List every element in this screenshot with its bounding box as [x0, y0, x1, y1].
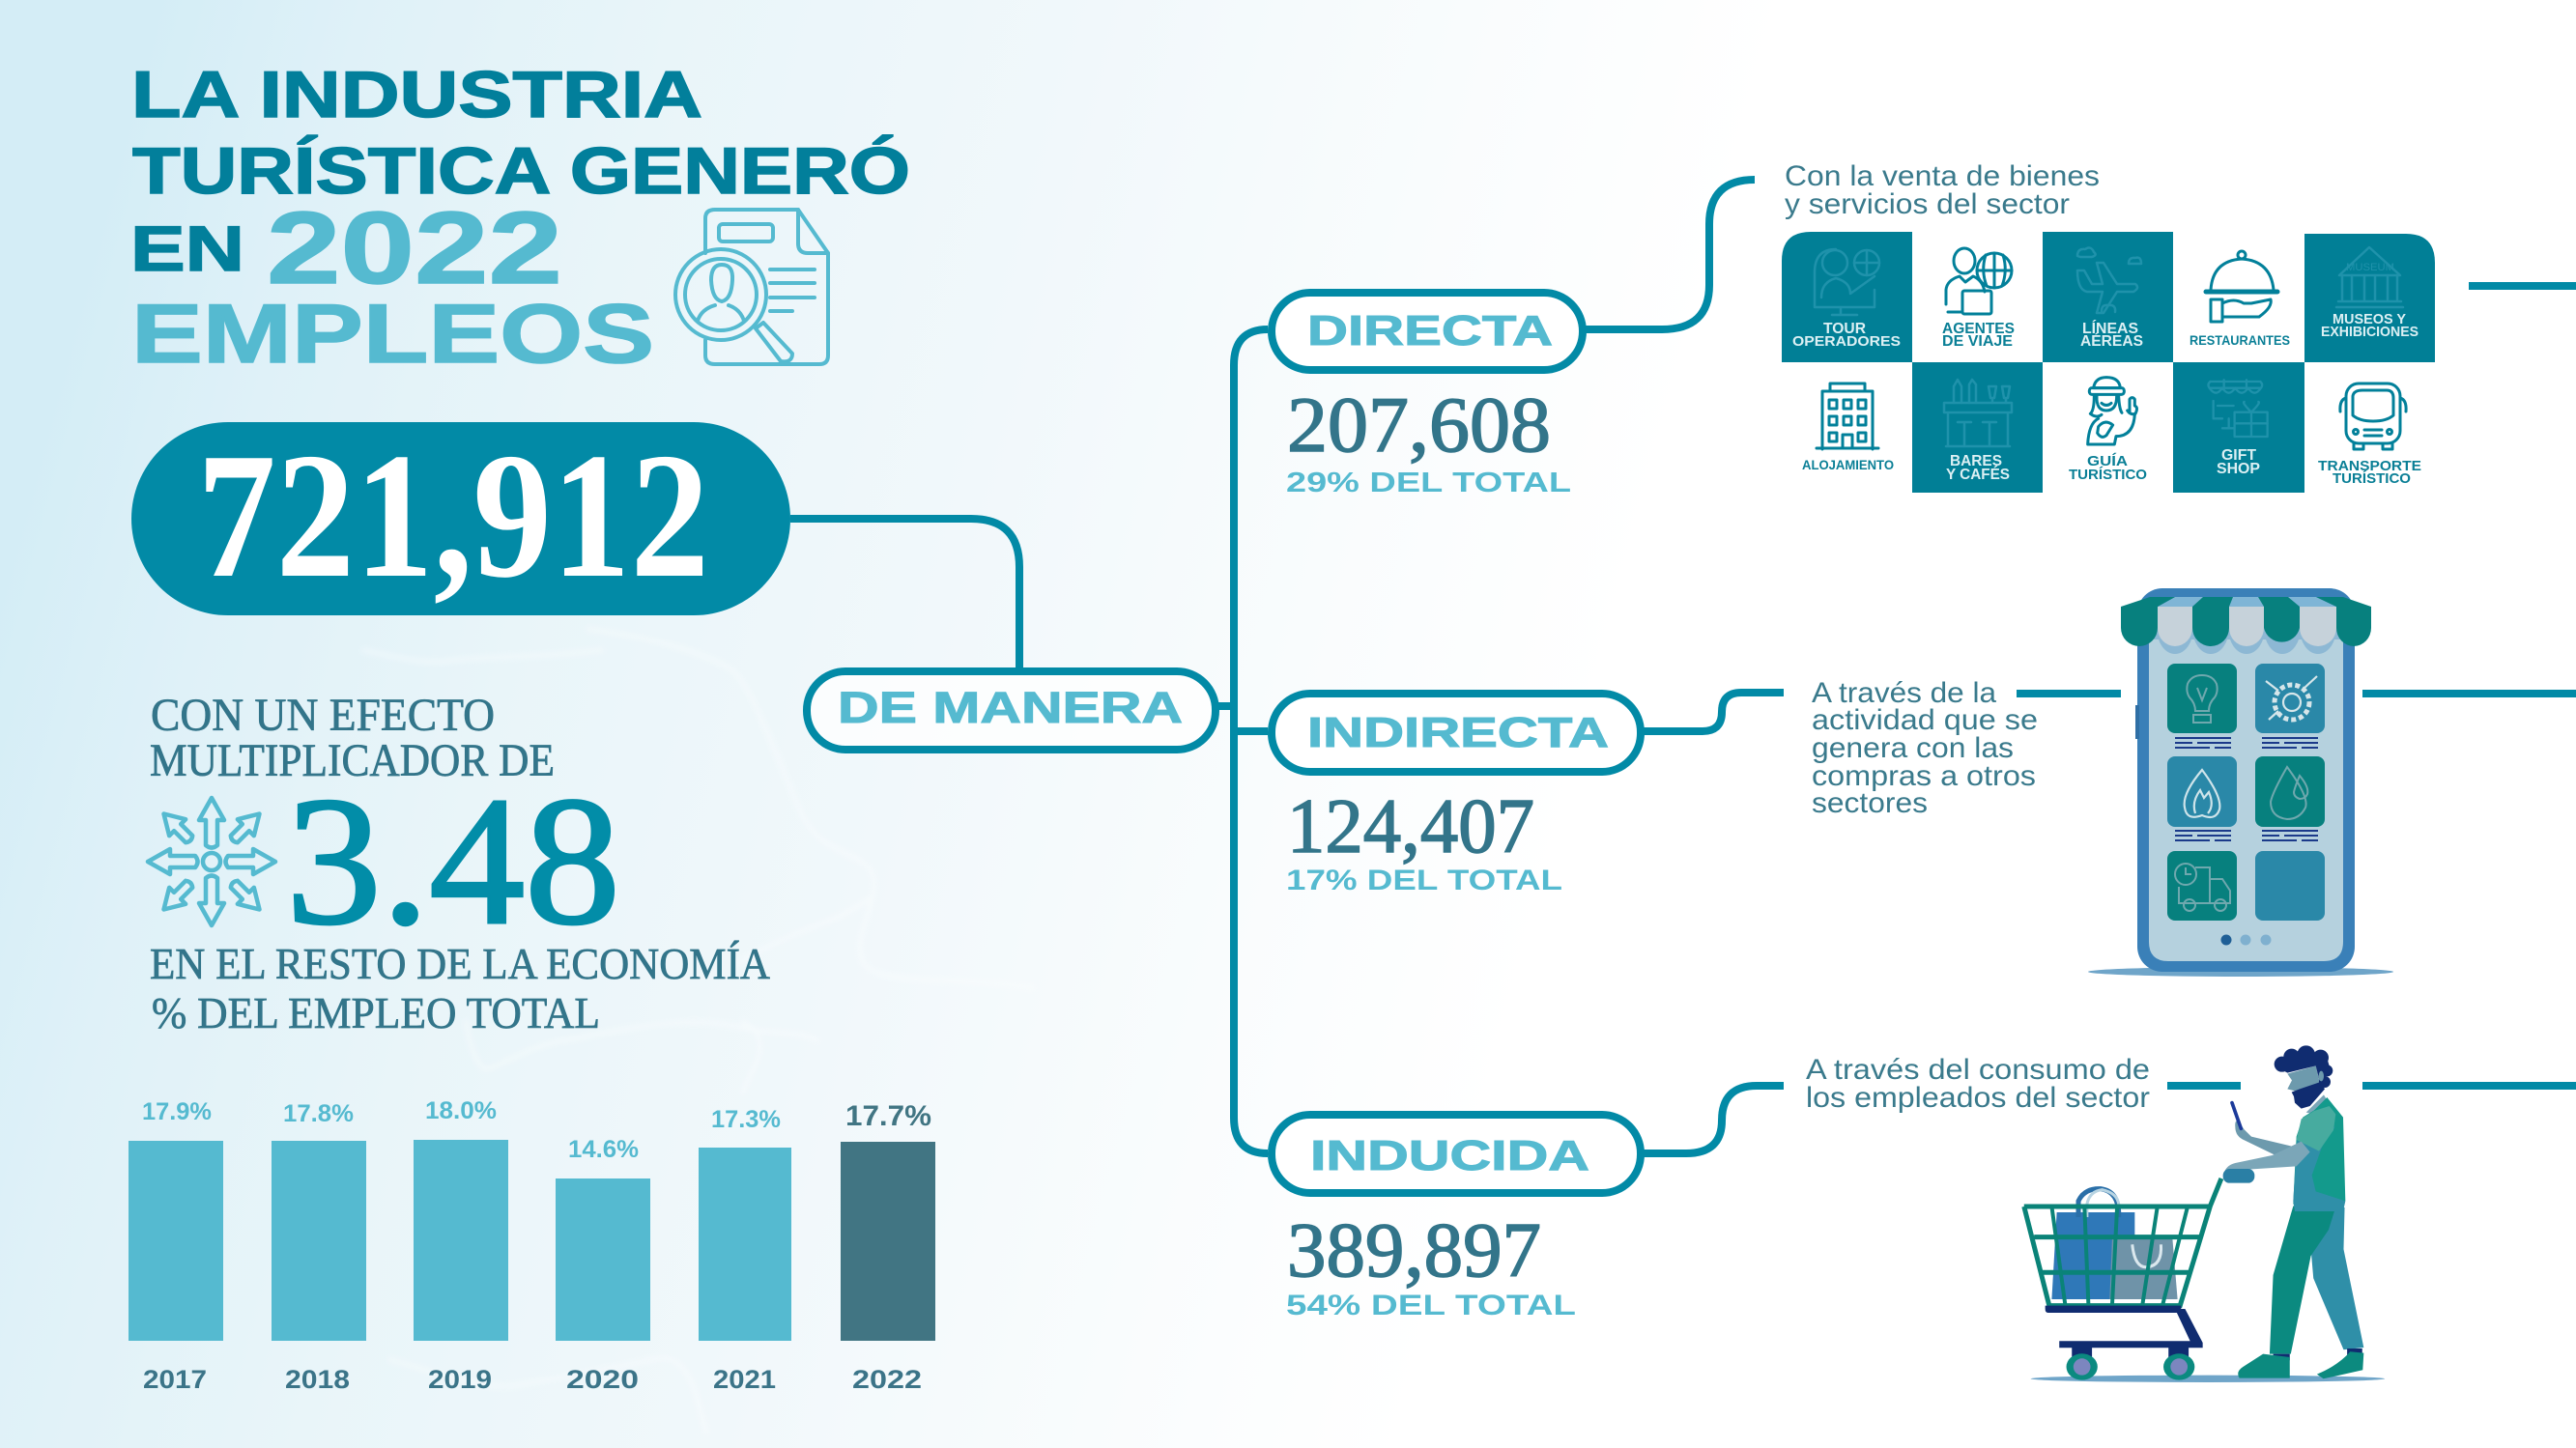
- total figure pill: 721,912: [197, 416, 709, 615]
- man legs: [2238, 1206, 2363, 1378]
- bar chart: [129, 1097, 935, 1394]
- panel: sector grid: AGENTES: [1942, 321, 2015, 337]
- text: indirecta description: compras a otros: [1812, 760, 2036, 792]
- arrow: directa connector: [1585, 180, 1755, 329]
- shopping bags: [2051, 1189, 2178, 1299]
- text: indirecta description: actividad que se: [1812, 704, 2038, 736]
- panel: sector grid: OPERADORES: [1792, 333, 1901, 350]
- text: inducida description: [1806, 1054, 2150, 1114]
- arrow: branch trunk: [1216, 329, 1268, 1153]
- panel: sector grid: SHOP: [2217, 461, 2260, 477]
- panel: sector grid: RESTAURANTES: [2190, 332, 2290, 348]
- title: 2022: [267, 191, 562, 305]
- icon: flame: [2185, 770, 2219, 817]
- panel: inducida: INDUCIDA: [1310, 1132, 1589, 1179]
- panel: sector grid: TOUR: [1823, 321, 1866, 337]
- icon: accommodation: [1817, 383, 1878, 449]
- bar chart: 2017: [143, 1365, 207, 1394]
- bar chart: 17.3%: [711, 1106, 781, 1133]
- bar chart: 2022: [852, 1365, 922, 1394]
- panel: sector grid: TURÍSTICO: [2333, 470, 2411, 487]
- panel: sector grid: ALOJAMIENTO: [1802, 458, 1894, 472]
- panel: sector grid: [1782, 232, 2435, 493]
- icon: water drop: [2271, 767, 2307, 819]
- title: EMPLEOS: [131, 288, 654, 381]
- bar chart: 2018: [285, 1365, 350, 1394]
- arrow: indirecta bars: [2017, 690, 2576, 697]
- icon: delivery truck: [2175, 864, 2230, 911]
- illustration: man with shopping cart: [2024, 1045, 2385, 1382]
- text: directa description: [1785, 160, 2100, 220]
- icon: travel agents: [1946, 248, 2012, 314]
- icon: airlines: [2077, 248, 2141, 313]
- cart: [2024, 1178, 2221, 1306]
- text: inducida description: los empleados del sector: [1806, 1082, 2150, 1114]
- panel: de manera pill: DE MANERA: [838, 683, 1183, 732]
- text: inducida description: A través del consumo de: [1806, 1054, 2150, 1086]
- multiplier heading: CON UN EFECTO: [151, 690, 495, 741]
- arrow: indirecta connector: [1643, 693, 1784, 731]
- panel: inducida: 54% DEL TOTAL: [1286, 1290, 1576, 1321]
- title: LA INDUSTRIA: [131, 58, 702, 131]
- arrow: directa output bar: [2469, 282, 2576, 290]
- panel: sector grid: AÉREAS: [2080, 331, 2143, 350]
- panel: indirecta: 17% DEL TOTAL: [1286, 865, 1562, 896]
- text: indirecta description: A través de la: [1812, 677, 1996, 709]
- panel: sector grid: GIFT: [2221, 447, 2256, 464]
- panel: inducida: [1272, 1115, 1641, 1321]
- panel: indirecta: 124,407: [1287, 784, 1534, 869]
- panel: sector grid: DE VIAJE: [1942, 333, 2013, 350]
- bar chart: 18.0%: [425, 1097, 497, 1124]
- multiplier caption: EN EL RESTO DE LA ECONOMÍA: [150, 939, 770, 988]
- panel: indirecta: INDIRECTA: [1307, 709, 1609, 756]
- panel: sector grid: BARES: [1950, 453, 2002, 469]
- icon: museum: MUSEUM: [2346, 262, 2394, 273]
- man upper body: [2223, 1045, 2345, 1211]
- panel: inducida: 389,897: [1287, 1208, 1541, 1293]
- text: directa description: y servicios del sector: [1785, 188, 2070, 220]
- bar chart: 17.7%: [845, 1100, 931, 1132]
- title: TURÍSTICA GENERÓ: [132, 134, 910, 208]
- icon: gift shop: [2208, 380, 2268, 437]
- multiplier heading: MULTIPLICADOR DE: [150, 735, 555, 786]
- icon: tourist transport: [2340, 383, 2406, 449]
- icon: restaurants: [2206, 251, 2277, 322]
- panel: sector grid: GUÍA: [2087, 453, 2128, 469]
- text: indirecta description: [1812, 677, 2038, 819]
- multiplier value: 3.48: [286, 760, 620, 963]
- multiplier caption: [150, 939, 770, 1037]
- icon: document with magnifier: [675, 210, 828, 364]
- icon: museum: [2336, 247, 2403, 307]
- icon: light bulb: [2187, 675, 2218, 723]
- illustration: phone store: [2088, 588, 2393, 977]
- panel: directa: 29% DEL TOTAL: [1286, 468, 1571, 498]
- bar chart: 14.6%: [568, 1136, 639, 1163]
- icon: bars and cafes: [1944, 380, 2012, 446]
- panel: sector grid: TRANSPORTE: [2318, 458, 2421, 474]
- arrow: connector total to de manera: [790, 519, 1019, 671]
- text: indirecta description: genera con las: [1812, 732, 2014, 764]
- multiplier caption: % DEL EMPLEO TOTAL: [152, 988, 600, 1037]
- panel: sector grid: Y CAFÉS: [1946, 465, 2010, 483]
- icon: gear and tools: [2266, 676, 2317, 720]
- panel: indirecta: [1272, 694, 1641, 896]
- panel: sector grid: LÍNEAS: [2082, 319, 2138, 337]
- bar chart: 17.9%: [142, 1098, 212, 1125]
- bar chart: 2020: [566, 1365, 639, 1394]
- text: indirecta description: sectores: [1812, 787, 1928, 819]
- icon: tourist guide: [2088, 378, 2137, 444]
- panel: de manera pill: [807, 671, 1216, 750]
- panel: sector grid: MUSEOS Y: [2333, 311, 2406, 327]
- panel: directa: 207,608: [1287, 381, 1551, 468]
- panel: directa: DIRECTA: [1307, 307, 1553, 355]
- bar chart: 2021: [713, 1365, 776, 1394]
- panel: directa: [1272, 293, 1583, 498]
- multiplier heading: [150, 690, 555, 786]
- title: [130, 58, 910, 381]
- arrow: inducida bars: [2167, 1082, 2576, 1090]
- panel: sector grid: TURÍSTICO: [2069, 467, 2147, 483]
- icon: tour operators: [1815, 249, 1879, 315]
- icon: expanding arrows: [148, 798, 275, 925]
- panel: sector grid: EXHIBICIONES: [2321, 324, 2419, 340]
- bar chart: 2019: [428, 1365, 492, 1394]
- text: directa description: Con la venta de bienes: [1785, 160, 2100, 192]
- title: EN: [130, 213, 244, 284]
- bar chart: 17.8%: [283, 1100, 354, 1127]
- arrow: inducida connector: [1643, 1086, 1784, 1153]
